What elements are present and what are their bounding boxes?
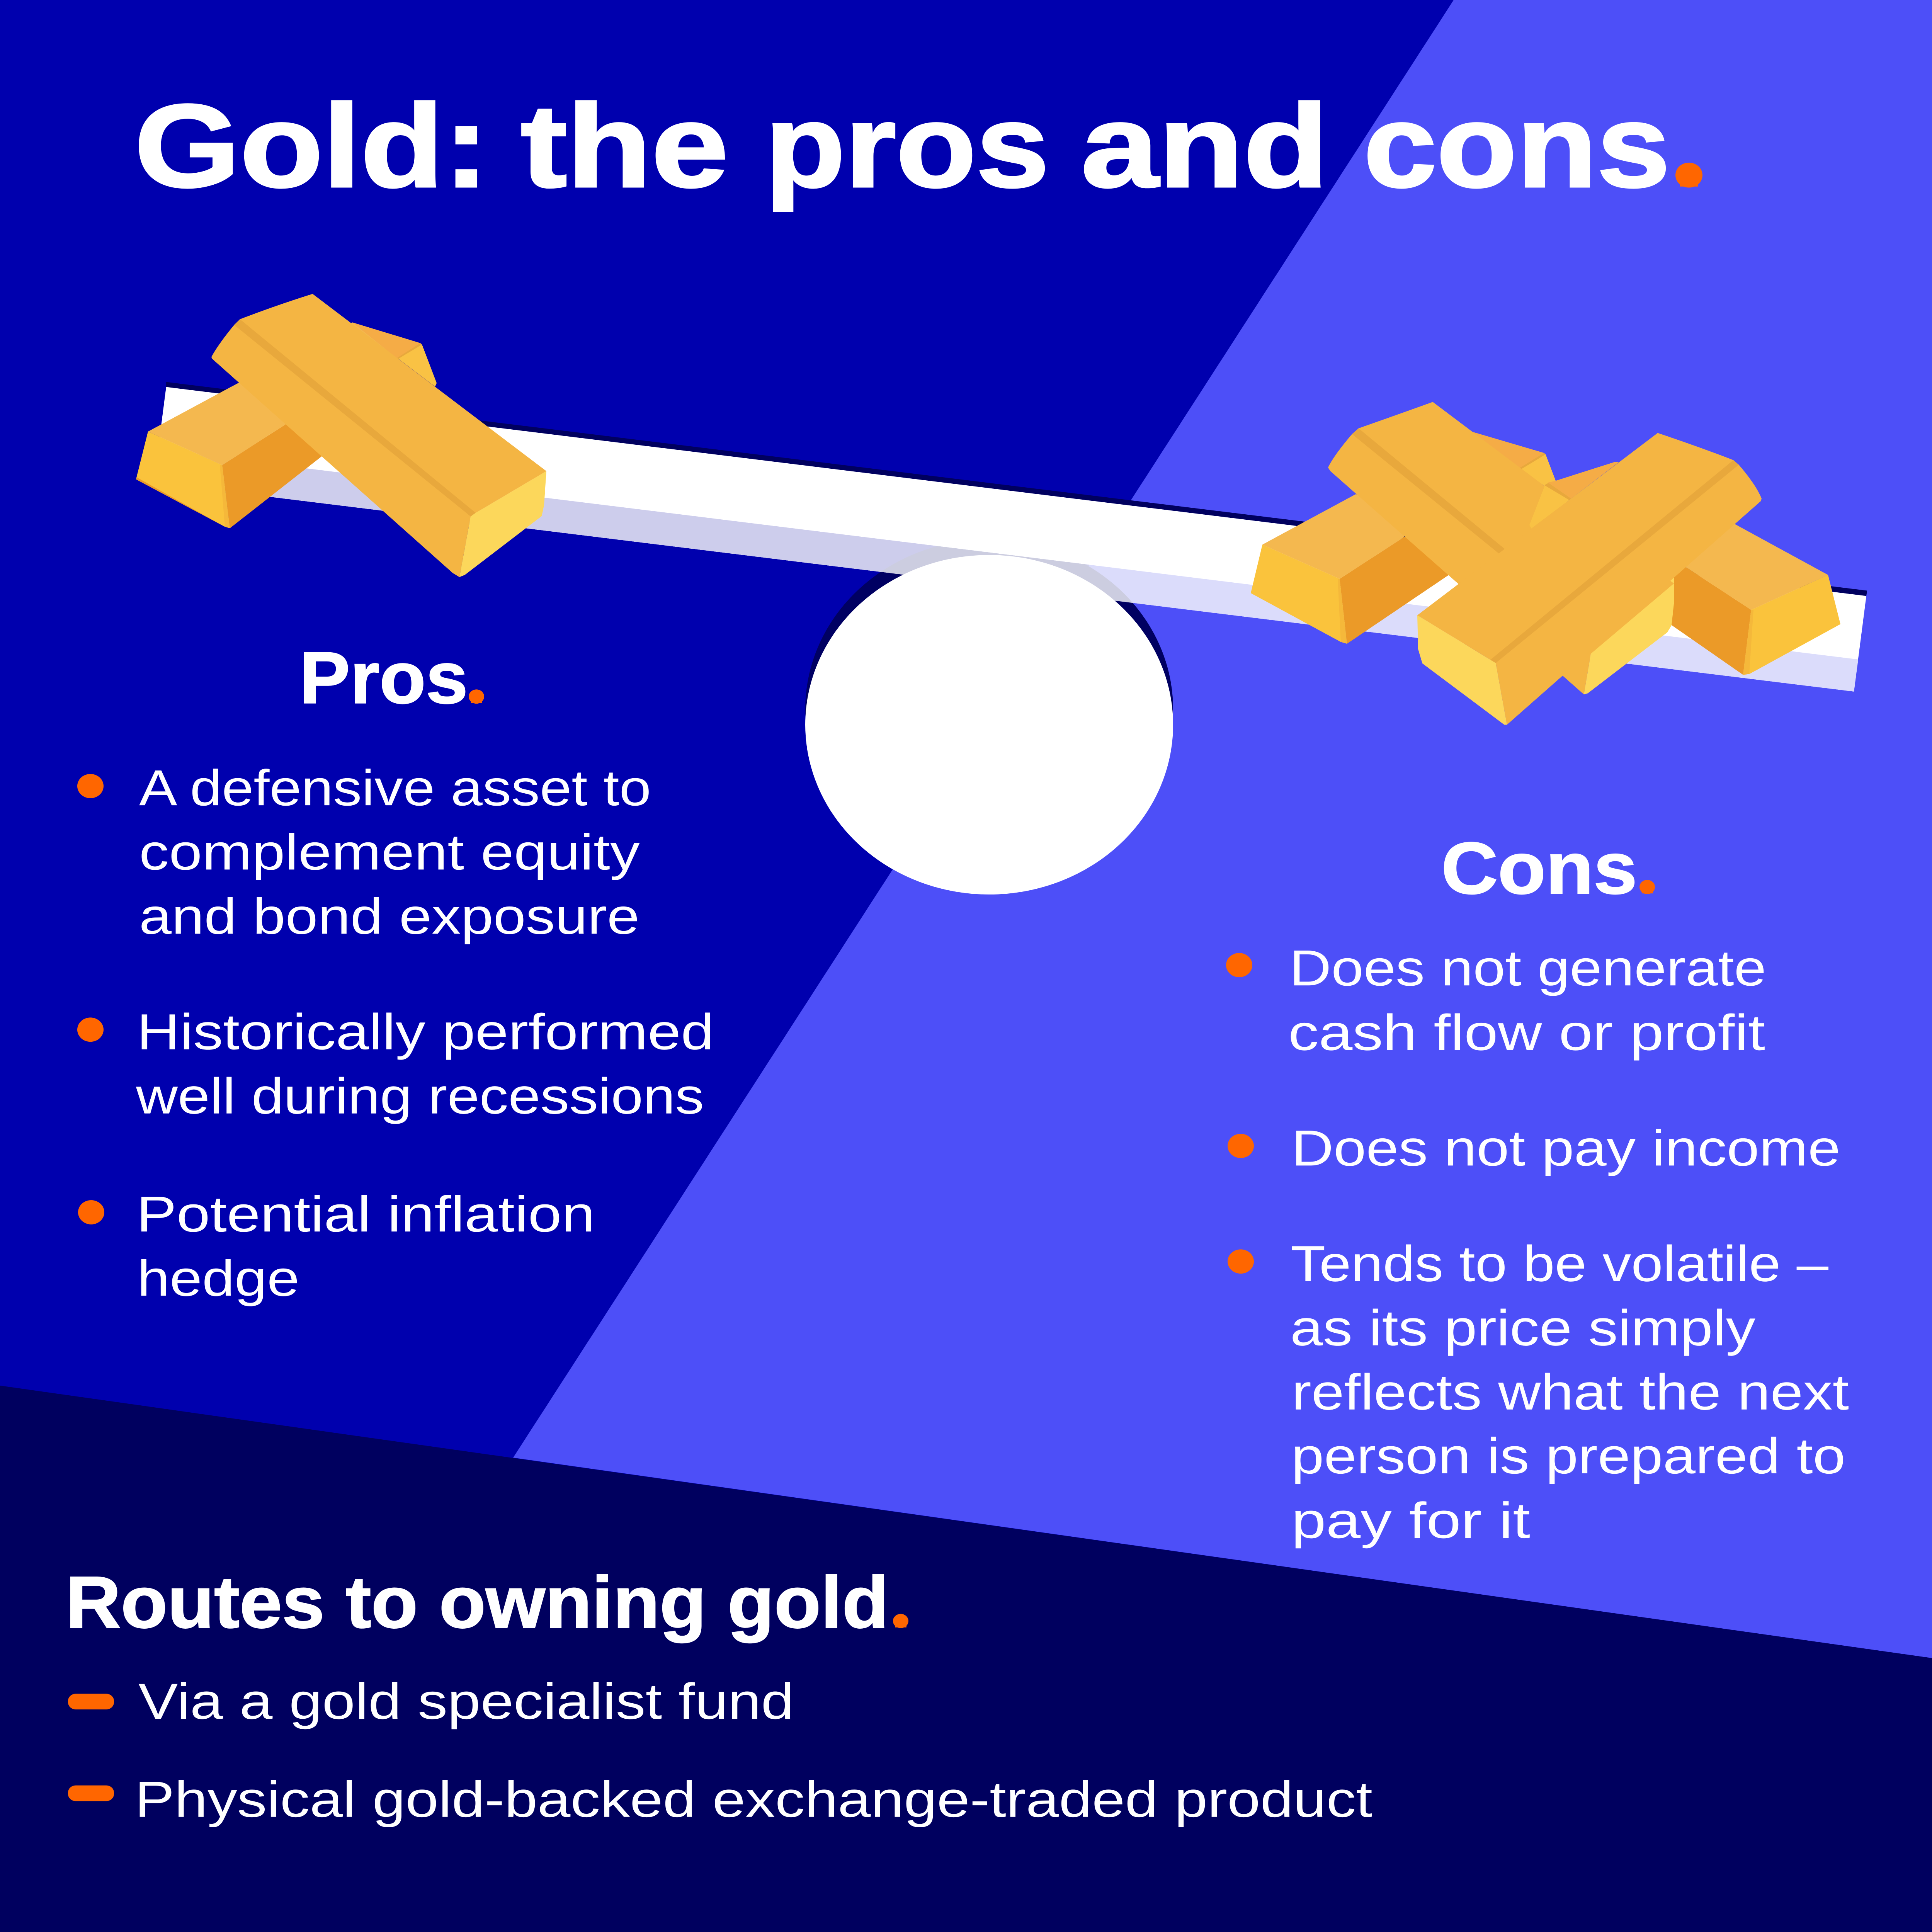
bullet icon <box>77 774 104 798</box>
title: Gold: <box>134 80 489 212</box>
con 1 text: cash flow or profit <box>1288 1004 1765 1061</box>
far end of right back bar <box>1529 462 1619 529</box>
routes heading: Routes to owning gold <box>66 1561 889 1643</box>
con 1 text: Does not generate <box>1289 939 1766 996</box>
bullet icon <box>78 1200 104 1225</box>
cons heading: . <box>1636 827 1658 909</box>
route 1 text: Via a gold specialist fund <box>138 1673 794 1730</box>
front bar <box>211 294 546 577</box>
routes panel <box>66 1561 1372 1828</box>
bullet icon <box>77 1017 104 1042</box>
pros heading: Pros <box>299 637 468 719</box>
cons heading: Cons <box>1441 827 1637 909</box>
pro 3 text <box>136 1185 595 1306</box>
top bar <box>1417 433 1762 725</box>
con 2 text: Does not pay income <box>1291 1119 1840 1176</box>
background: light blue diagonal panel <box>513 0 1932 1658</box>
bullet icon <box>1228 1249 1254 1274</box>
bullet icon <box>1228 1134 1254 1158</box>
pro 1 text <box>139 759 651 944</box>
beam top shadow edge <box>166 382 1867 596</box>
gold bars: right <box>1251 402 1840 725</box>
dash icon <box>68 1786 114 1801</box>
pro 3 text: Potential inflation <box>136 1185 595 1242</box>
left back bar <box>1251 432 1556 644</box>
con 3 text: as its price simply <box>1290 1299 1756 1356</box>
beam <box>154 387 1866 692</box>
background: navy bottom panel <box>0 1386 1932 1932</box>
con 3 text: pay for it <box>1291 1492 1530 1549</box>
dash icon <box>68 1694 114 1709</box>
pro 3 text: hedge <box>137 1250 299 1306</box>
pros heading: . <box>466 637 488 719</box>
routes heading: . <box>890 1561 912 1643</box>
title <box>134 80 1707 212</box>
route 2 text: Physical gold-backed exchange-traded product <box>135 1771 1372 1828</box>
title: the <box>521 80 728 212</box>
middle bar <box>1328 402 1674 694</box>
con 3 text <box>1290 1235 1849 1549</box>
pro 2 text: well during recessions <box>136 1068 704 1124</box>
beam shadow band <box>201 455 1858 692</box>
gold bars: left <box>136 294 546 577</box>
cons panel <box>1226 827 1849 1549</box>
pro 2 text: Historically performed <box>137 1003 714 1060</box>
pros panel <box>77 637 714 1306</box>
con 1 text <box>1288 939 1766 1061</box>
pivot shadow <box>805 572 1173 717</box>
pro 1 text: complement equity <box>139 823 640 880</box>
bullet icon <box>1226 953 1252 977</box>
pivot circle <box>805 555 1173 895</box>
con 3 text: reflects what the next <box>1292 1364 1849 1420</box>
back bar <box>136 322 437 528</box>
pro 2 text <box>136 1003 714 1124</box>
title: pros <box>765 80 1049 212</box>
title: . <box>1671 80 1707 212</box>
seesaw <box>154 382 1867 895</box>
pro 1 text: and bond exposure <box>139 888 639 944</box>
title: and <box>1081 80 1328 212</box>
title: cons <box>1364 80 1670 212</box>
con 3 text: Tends to be volatile – <box>1291 1235 1828 1292</box>
right back bar <box>1623 514 1840 675</box>
pro 1 text: A defensive asset to <box>139 759 651 816</box>
con 3 text: person is prepared to <box>1291 1427 1845 1484</box>
